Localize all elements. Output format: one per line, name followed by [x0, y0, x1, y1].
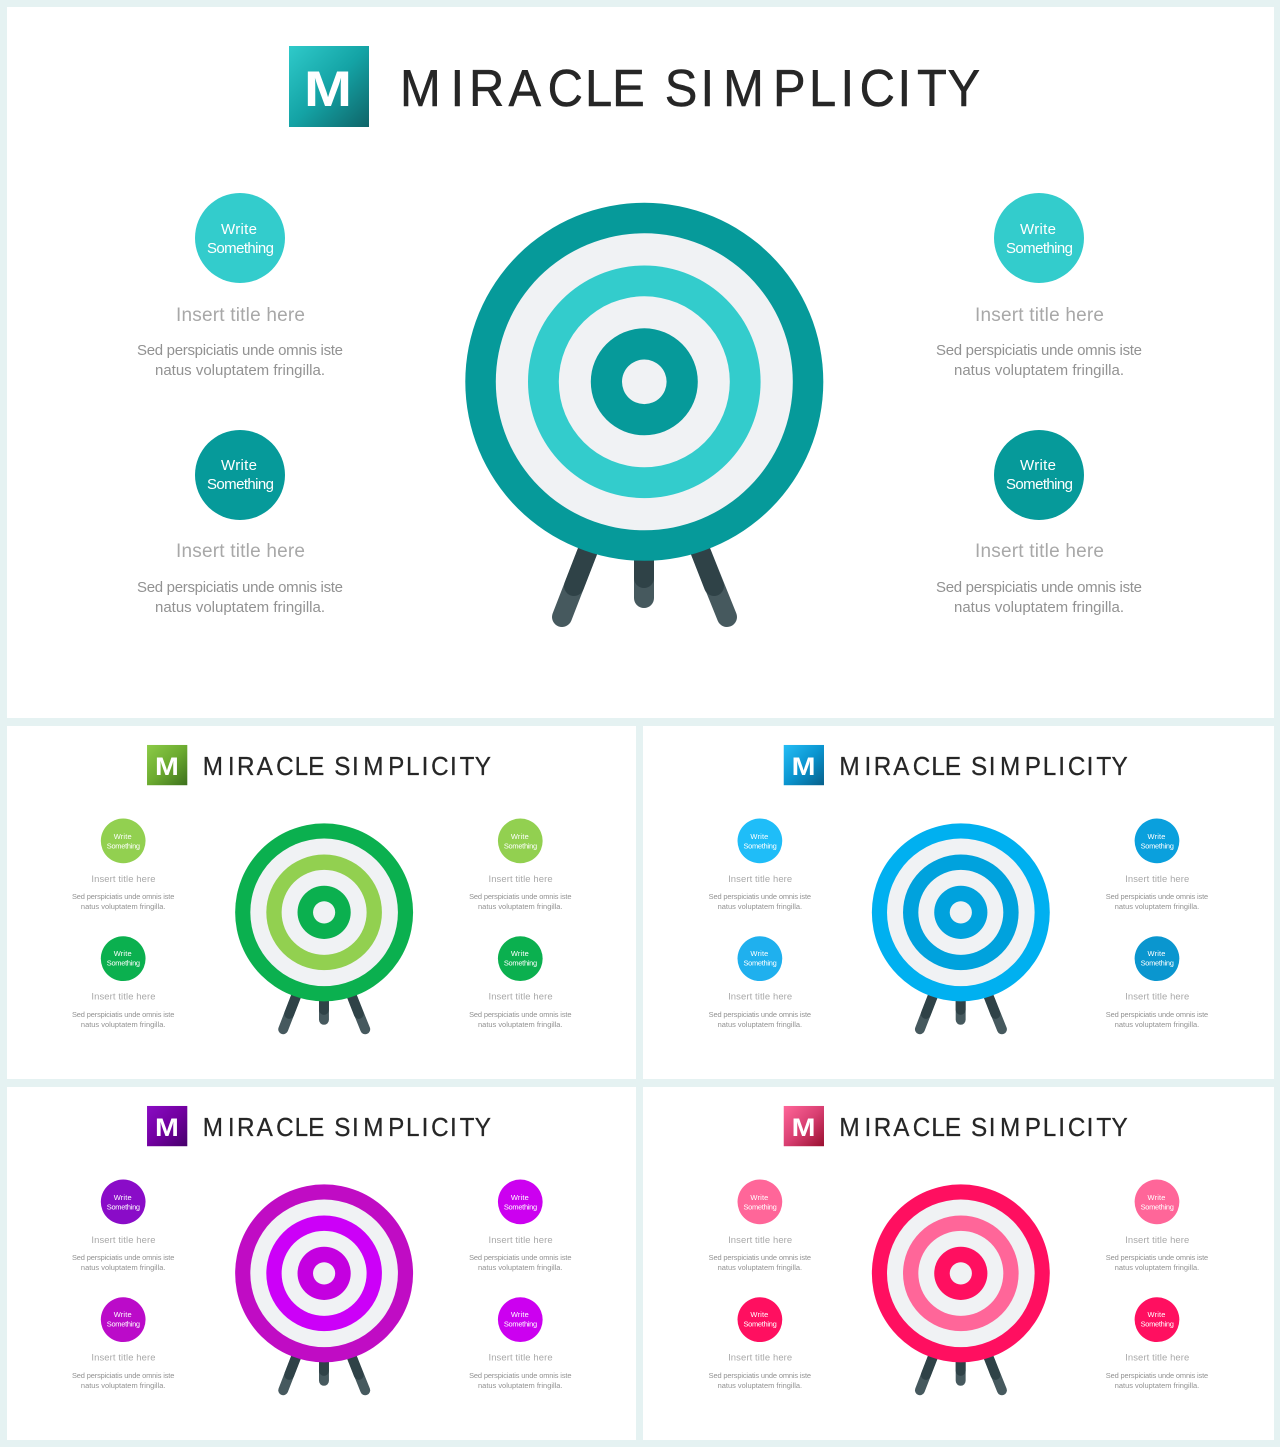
- logo: blue M square: [784, 745, 824, 785]
- callout: bottom right: Something: [1006, 476, 1073, 493]
- callout: bottom left: Insert title here: [728, 1352, 792, 1363]
- callout: bottom right: Something: [504, 959, 537, 968]
- logo: purple M square: M: [155, 1115, 179, 1142]
- callout: bottom left: Sed perspiciatis unde omnis iste: [72, 1371, 174, 1380]
- callout: top left: [709, 1180, 811, 1272]
- title: MIRACLE SIMPLICITY: [839, 1113, 1128, 1142]
- callout: top right: Insert title here: [1125, 874, 1189, 885]
- callout: top left: Write: [750, 1193, 768, 1202]
- logo: purple M square: [147, 1106, 187, 1146]
- callout: bottom left: [137, 430, 343, 616]
- callout: top right: Write: [511, 1193, 529, 1202]
- callout: bottom right: natus voluptatem fringilla.: [478, 1020, 563, 1029]
- callout: bottom left: Insert title here: [91, 1352, 155, 1363]
- callout: bottom left: Something: [107, 1320, 140, 1329]
- callout: bottom left: Write: [114, 1310, 132, 1319]
- callout: bottom left: [709, 1297, 811, 1390]
- callout: bottom right: Write: [1148, 949, 1165, 958]
- callout: top left: [72, 1180, 174, 1272]
- title: MIRACLE SIMPLICITY: [203, 1113, 491, 1142]
- icon: target on stand: [235, 1184, 413, 1390]
- callout: bottom left: Sed perspiciatis unde omnis iste: [72, 1010, 174, 1019]
- callout: top right: natus voluptatem fringilla.: [478, 1263, 563, 1272]
- callout: bottom left: Sed perspiciatis unde omnis iste: [709, 1371, 811, 1380]
- callout: bottom left: natus voluptatem fringilla.: [718, 1020, 802, 1029]
- callout: top left: Insert title here: [91, 874, 155, 885]
- callout: bottom right: Sed perspiciatis unde omnis iste: [1106, 1010, 1208, 1019]
- callout: bottom right: Something: [1141, 959, 1174, 968]
- callout: bottom right: [469, 1297, 571, 1390]
- callout: top left: Insert title here: [91, 1235, 155, 1246]
- callout: top left: [72, 819, 174, 911]
- callout: top right: natus voluptatem fringilla.: [1115, 902, 1199, 911]
- callout: top right: Insert title here: [1125, 1235, 1189, 1246]
- callout: top left: Something: [107, 841, 140, 850]
- icon: target on stand: [872, 823, 1050, 1029]
- callout: bottom left: [72, 936, 174, 1029]
- callout: bottom right: natus voluptatem fringilla.: [478, 1381, 563, 1390]
- callout: top right: [469, 1180, 571, 1272]
- callout: bottom right: Sed perspiciatis unde omnis iste: [469, 1371, 571, 1380]
- callout: top right: Something: [1141, 1202, 1174, 1211]
- icon: target on stand: [872, 1184, 1050, 1390]
- callout: bottom left: Something: [207, 476, 274, 493]
- callout: bottom right: Write: [511, 1310, 529, 1319]
- panel: pink slide: [643, 1087, 1274, 1440]
- callout: bottom left: Write: [221, 457, 257, 474]
- callout: top left: natus voluptatem fringilla.: [81, 902, 165, 911]
- callout: top right: Sed perspiciatis unde omnis iste: [1106, 892, 1208, 901]
- callout: bottom right: Insert title here: [1125, 1352, 1189, 1363]
- logo: pink M square: [784, 1106, 824, 1146]
- callout: bottom left: Sed perspiciatis unde omnis iste: [137, 579, 343, 596]
- callout: top right: Sed perspiciatis unde omnis iste: [936, 342, 1142, 359]
- callout: top right: Write: [1148, 1193, 1165, 1202]
- callout: bottom left: Something: [743, 1320, 777, 1329]
- callout: top right: Insert title here: [488, 1235, 553, 1246]
- callout: bottom left: natus voluptatem fringilla.: [81, 1381, 165, 1390]
- callout: bottom left: natus voluptatem fringilla.: [718, 1381, 802, 1390]
- callout: top right: Insert title here: [975, 305, 1104, 326]
- callout: bottom left: Insert title here: [91, 991, 155, 1002]
- callout: bottom left: [709, 936, 811, 1029]
- callout: top left: natus voluptatem fringilla.: [718, 902, 802, 911]
- callout: top left: Sed perspiciatis unde omnis iste: [137, 342, 343, 359]
- logo: blue M square: M: [792, 754, 816, 781]
- callout: top right: Something: [1006, 240, 1073, 257]
- callout: bottom right: [1106, 1297, 1208, 1390]
- callout: top left: Insert title here: [176, 305, 305, 326]
- callout: top left: natus voluptatem fringilla.: [81, 1263, 165, 1272]
- callout: bottom left: [72, 1297, 174, 1390]
- callout: top left: [137, 193, 343, 379]
- callout: top left: Something: [207, 240, 274, 257]
- callout: bottom left: Write: [750, 949, 768, 958]
- callout: bottom right: Something: [1141, 1320, 1174, 1329]
- callout: bottom right: natus voluptatem fringilla.: [1115, 1020, 1199, 1029]
- callout: top left: Sed perspiciatis unde omnis iste: [72, 1253, 174, 1262]
- logo: green M square: [147, 745, 187, 785]
- logo: teal M square: M: [304, 61, 352, 117]
- callout: top right: natus voluptatem fringilla.: [478, 902, 563, 911]
- callout: top left: Write: [750, 832, 768, 841]
- callout: bottom right: Insert title here: [1125, 991, 1189, 1002]
- callout: bottom right: natus voluptatem fringilla.: [1115, 1381, 1199, 1390]
- panel: blue slide: [643, 726, 1274, 1079]
- callout: top right: Something: [504, 1202, 537, 1211]
- callout: top left: natus voluptatem fringilla.: [718, 1263, 802, 1272]
- callout: top left: Write: [114, 1193, 132, 1202]
- callout: bottom right: Write: [511, 949, 529, 958]
- callout: top left: Sed perspiciatis unde omnis iste: [72, 892, 174, 901]
- callout: top right: natus voluptatem fringilla.: [1115, 1263, 1199, 1272]
- logo: pink M square: M: [792, 1115, 816, 1142]
- callout: bottom right: natus voluptatem fringilla.: [954, 599, 1124, 616]
- callout: top right: Write: [1020, 221, 1056, 238]
- callout: bottom right: Something: [504, 1320, 537, 1329]
- callout: top left: Something: [743, 841, 777, 850]
- callout: bottom right: [1106, 936, 1208, 1029]
- callout: bottom right: Write: [1148, 1310, 1165, 1319]
- callout: top left: natus voluptatem fringilla.: [155, 362, 325, 379]
- callout: bottom right: Sed perspiciatis unde omnis iste: [936, 579, 1142, 596]
- callout: top left: Write: [221, 221, 257, 238]
- callout: top right: natus voluptatem fringilla.: [954, 362, 1124, 379]
- callout: bottom right: Sed perspiciatis unde omnis iste: [1106, 1371, 1208, 1380]
- callout: bottom left: Write: [750, 1310, 768, 1319]
- callout: bottom left: Insert title here: [728, 991, 792, 1002]
- callout: bottom left: natus voluptatem fringilla.: [81, 1020, 165, 1029]
- callout: bottom right: Insert title here: [488, 1352, 553, 1363]
- callout: top left: Something: [743, 1202, 777, 1211]
- callout: top right: Insert title here: [488, 874, 553, 885]
- callout: top left: Sed perspiciatis unde omnis iste: [709, 1253, 811, 1262]
- callout: top right: Write: [511, 832, 529, 841]
- callout: bottom right: Write: [1020, 457, 1056, 474]
- callout: top right: Something: [1141, 841, 1174, 850]
- callout: top right: Sed perspiciatis unde omnis iste: [469, 892, 571, 901]
- logo: green M square: M: [155, 754, 179, 781]
- callout: bottom left: Sed perspiciatis unde omnis iste: [709, 1010, 811, 1019]
- callout: bottom left: Something: [743, 959, 777, 968]
- title: MIRACLE SIMPLICITY: [839, 752, 1128, 781]
- panel: large teal slide: [7, 7, 1274, 718]
- callout: top left: Write: [114, 832, 132, 841]
- callout: bottom right: Sed perspiciatis unde omnis iste: [469, 1010, 571, 1019]
- callout: bottom left: Write: [114, 949, 132, 958]
- callout: bottom left: Insert title here: [176, 541, 305, 562]
- callout: top right: Sed perspiciatis unde omnis iste: [1106, 1253, 1208, 1262]
- panel: purple slide: [7, 1087, 636, 1440]
- title: MIRACLE SIMPLICITY: [400, 59, 980, 117]
- callout: top right: Something: [504, 841, 537, 850]
- callout: bottom right: Insert title here: [488, 991, 553, 1002]
- logo: teal M square: [289, 46, 369, 127]
- panel: green slide: [7, 726, 636, 1079]
- callout: top right: Sed perspiciatis unde omnis iste: [469, 1253, 571, 1262]
- callout: top left: Something: [107, 1202, 140, 1211]
- callout: bottom right: [936, 430, 1142, 616]
- title: MIRACLE SIMPLICITY: [203, 752, 491, 781]
- callout: bottom left: natus voluptatem fringilla.: [155, 599, 325, 616]
- callout: top right: Write: [1148, 832, 1165, 841]
- icon: target on stand: [235, 823, 413, 1029]
- icon: target on stand: [465, 203, 823, 617]
- callout: bottom right: [469, 936, 571, 1029]
- callout: top left: Insert title here: [728, 1235, 792, 1246]
- callout: bottom left: Something: [107, 959, 140, 968]
- callout: top left: Insert title here: [728, 874, 792, 885]
- callout: bottom right: Insert title here: [975, 541, 1104, 562]
- callout: top right: [936, 193, 1142, 379]
- callout: top left: Sed perspiciatis unde omnis iste: [709, 892, 811, 901]
- callout: top left: [709, 819, 811, 911]
- callout: top right: [1106, 1180, 1208, 1272]
- callout: top right: [469, 819, 571, 911]
- callout: top right: [1106, 819, 1208, 911]
